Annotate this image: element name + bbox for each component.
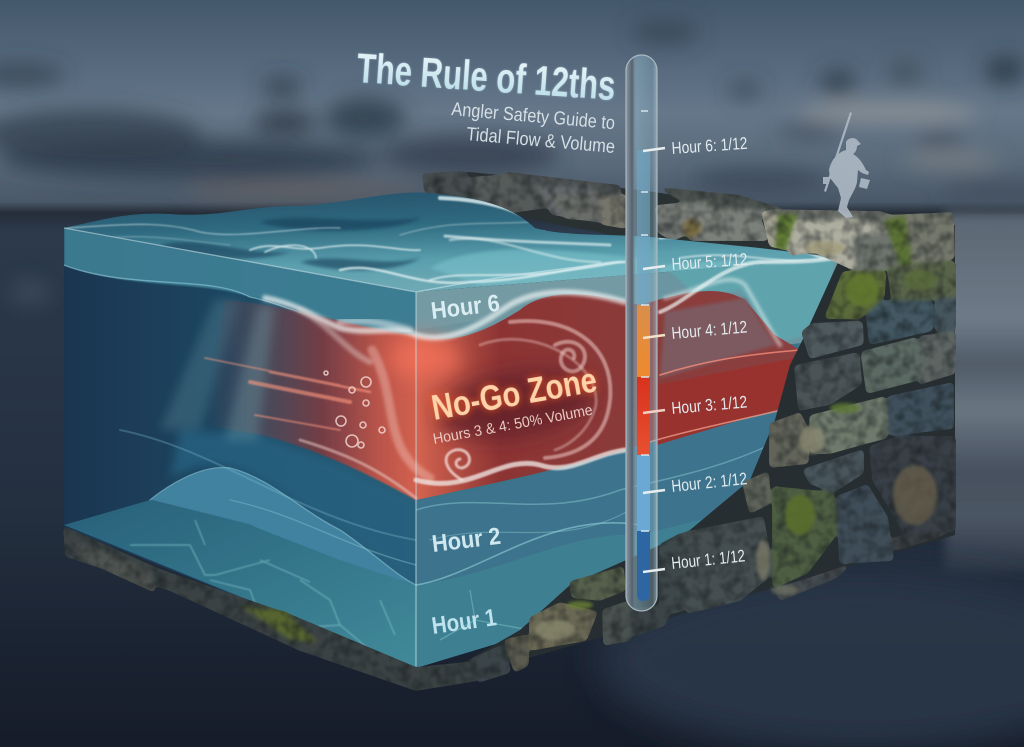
title block [355, 44, 617, 158]
below-band mid layer [170, 428, 390, 558]
hour 4 label: Hour 4: 1/12 [671, 317, 748, 343]
barnacles and moss [535, 241, 937, 640]
hour 6 label [643, 134, 748, 158]
hour 1 label: Hour 1: 1/12 [670, 546, 746, 573]
back stone pier [423, 172, 790, 250]
layer label: hour 2: Hour 2 [430, 523, 502, 558]
hour 5 label: Hour 5: 1/12 [671, 250, 748, 274]
wall backing [416, 225, 955, 690]
orange segment [637, 305, 650, 377]
turbulent foam and vortices [265, 258, 835, 498]
hour 6 label: Hour 6: 1/12 [671, 134, 748, 158]
layer label: hour 6: Hour 6 [429, 290, 501, 325]
hour two layer [150, 468, 416, 585]
subtitle: Tidal Flow & Volume [466, 124, 616, 158]
subtitle: Angler Safety Guide to [451, 99, 616, 134]
left face [64, 228, 416, 668]
light blue segment [637, 455, 650, 531]
hour 2 label [643, 469, 748, 496]
title: The Rule of 12ths [355, 44, 617, 109]
bubbles [324, 371, 385, 448]
hour 1 label [643, 546, 746, 573]
icon: angler silhouette [823, 112, 870, 218]
hour 5 label [643, 250, 748, 274]
hour scale labels [643, 134, 748, 573]
rock wall [416, 210, 955, 690]
glass tube [626, 55, 657, 611]
hour 2 label: Hour 2: 1/12 [670, 469, 748, 496]
blue upper fill [637, 150, 650, 305]
red no-go band [160, 291, 800, 500]
no-go zone subtitle: Hours 3 & 4: 50% Volume [432, 402, 594, 448]
minor ticks [641, 111, 649, 531]
foam right of tube [660, 258, 835, 312]
red segment [637, 377, 650, 455]
water block [64, 193, 840, 670]
no-go zone heading: No-Go Zone [429, 360, 600, 428]
right face [416, 256, 840, 670]
light rays over left face [160, 300, 240, 430]
water surface [64, 193, 840, 300]
wall stones [470, 210, 955, 682]
dark blue segment [637, 531, 650, 601]
hour 4 label [643, 317, 748, 343]
subtitle [451, 99, 616, 158]
upper teal layer [64, 228, 416, 345]
hour 3 label [643, 392, 748, 418]
vortex lower left [446, 450, 469, 480]
thermometer [626, 55, 748, 611]
seabed strip [64, 527, 478, 690]
layer label: hour 1: Hour 1 [430, 604, 498, 640]
front corner edge [64, 228, 625, 668]
hour 3 label: Hour 3: 1/12 [671, 392, 748, 418]
vortex upper right [510, 321, 610, 458]
tide floor [64, 500, 416, 668]
